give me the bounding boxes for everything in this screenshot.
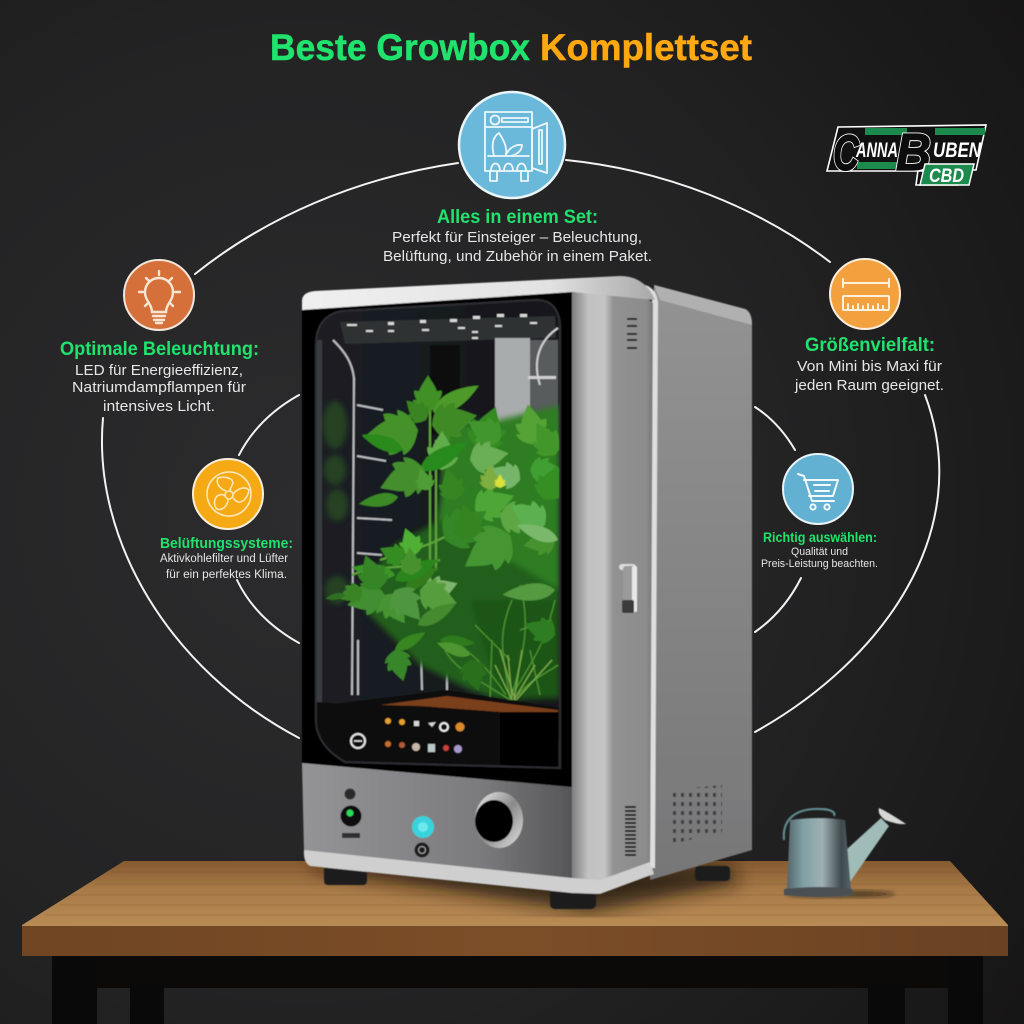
block: Richtig auswählen: Richtig auswählen: bbox=[763, 530, 877, 545]
block: Belüftungssysteme: Belüftungssysteme: bbox=[160, 536, 293, 552]
light bar bbox=[340, 316, 556, 344]
block: Größenvielfalt: Von Mini bis Maxi für bbox=[797, 358, 942, 375]
logo: CannaBuben CBD: ANNA bbox=[855, 139, 898, 162]
block: Optimale Beleuchtung: LED für Energieeffizienz, bbox=[75, 362, 243, 379]
growbox bbox=[302, 276, 752, 909]
block: Optimale Beleuchtung: intensives Licht. bbox=[103, 398, 215, 415]
logo: CannaBuben CBD: C bbox=[833, 125, 860, 181]
logo: CannaBuben CBD: B bbox=[896, 124, 931, 182]
block: Belüftungssysteme bbox=[160, 536, 293, 581]
knob bbox=[475, 792, 523, 848]
logo: CannaBuben CBD bbox=[827, 124, 986, 187]
control panel bbox=[302, 763, 572, 880]
icon: growbox (blue circle) bbox=[459, 92, 565, 198]
thin lower stalks bbox=[494, 650, 553, 702]
plant dark mass bbox=[365, 405, 560, 700]
block: Richtig auswählen bbox=[761, 530, 878, 570]
table bbox=[22, 861, 1008, 1024]
icon: fan (yellow circle) bbox=[193, 459, 263, 529]
feet bbox=[324, 866, 730, 909]
block: Belüftungssysteme: Aktivkohlefilter und Lüfter bbox=[160, 553, 288, 565]
side panel bbox=[650, 285, 752, 880]
icon: light bulb (orange circle) bbox=[124, 260, 194, 330]
stems bbox=[351, 410, 445, 578]
plant bbox=[325, 375, 572, 712]
logo: CannaBuben CBD: CBD bbox=[929, 166, 964, 187]
window interior bbox=[316, 298, 572, 770]
display icons bbox=[351, 718, 464, 753]
logo: CannaBuben CBD: B bbox=[896, 124, 931, 182]
logo: CannaBuben CBD: UBEN bbox=[933, 139, 982, 162]
title bbox=[270, 27, 752, 68]
block: Optimale Beleuchtung: Natriumdampflampen für bbox=[72, 379, 246, 396]
power indicator bbox=[340, 788, 362, 838]
icon: ruler (orange circle) bbox=[830, 259, 900, 329]
back bracket bbox=[494, 337, 531, 424]
block: Größenvielfalt: jeden Raum geeignet. bbox=[794, 377, 944, 394]
block: Alles in einem Set: Alles in einem Set: bbox=[437, 207, 598, 228]
title: Beste Growbox bbox=[270, 27, 530, 68]
block: Größenvielfalt bbox=[794, 335, 944, 394]
watering can bbox=[784, 808, 906, 898]
side vent grid bbox=[668, 785, 722, 845]
block: Alles in einem Set: Perfekt für Einsteiger – Beleuchtung, bbox=[392, 229, 642, 246]
connector arcs bbox=[102, 160, 939, 738]
block: Größenvielfalt: Größenvielfalt: bbox=[805, 335, 935, 356]
table shadow under box bbox=[310, 860, 740, 912]
icon: shopping cart (blue circle) bbox=[783, 454, 853, 524]
glass frame edge bbox=[316, 300, 560, 768]
block: Optimale Beleuchtung: Optimale Beleuchtung: bbox=[60, 338, 259, 360]
vents bbox=[625, 319, 637, 855]
base strip bbox=[304, 850, 654, 894]
door strip bbox=[641, 285, 658, 868]
logo: CannaBuben CBD: C bbox=[833, 125, 860, 181]
block: Belüftungssysteme: für ein perfektes Klima. bbox=[166, 569, 287, 581]
tray and soil bbox=[325, 690, 560, 740]
corner column bbox=[570, 292, 653, 893]
title: Komplettset bbox=[540, 27, 752, 68]
block: Alles in einem Set bbox=[383, 207, 652, 265]
teal button bbox=[412, 816, 434, 858]
left frame rails bbox=[333, 340, 447, 695]
block: Richtig auswählen: Preis-Leistung beachten. bbox=[761, 558, 878, 570]
leaves bbox=[413, 375, 443, 412]
block: Richtig auswählen: Qualität und bbox=[791, 546, 848, 558]
block: Alles in einem Set: Belüftung, und Zubehör in einem Paket. bbox=[383, 248, 652, 265]
block: Optimale Beleuchtung bbox=[60, 338, 259, 415]
door handle bbox=[619, 564, 637, 613]
rear glass reflection bbox=[316, 340, 322, 703]
top bar bbox=[302, 276, 655, 310]
bezel bbox=[302, 292, 572, 790]
